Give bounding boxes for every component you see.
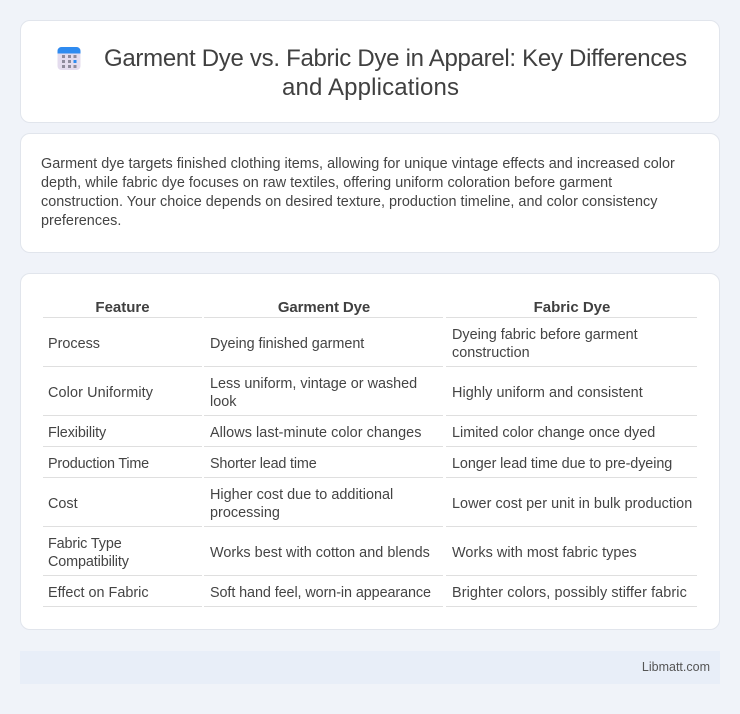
row: Process: Process <box>48 336 100 352</box>
row: Fabric Type Compatibility <box>48 536 637 570</box>
footer bar <box>20 651 720 684</box>
row: Production Time: Longer lead time due to pre-dyeing <box>452 456 672 472</box>
row: Effect on Fabric: Soft hand feel, worn-in appearance <box>210 585 431 601</box>
row: Color Uniformity: look <box>210 394 236 410</box>
row: Production Time <box>48 456 672 472</box>
row: Production Time: Production Time <box>48 456 149 472</box>
row: Effect on Fabric <box>48 585 687 601</box>
row: Color Uniformity: Less uniform, vintage or washed <box>210 376 417 392</box>
row: Process: Dyeing finished garment <box>210 336 364 352</box>
table header: Fabric Dye <box>534 299 610 316</box>
row: Color Uniformity <box>48 376 643 410</box>
row: Color Uniformity: Highly uniform and consistent <box>452 385 643 401</box>
row: Cost: Higher cost due to additional <box>210 487 393 503</box>
row: Cost: Lower cost per unit in bulk production <box>452 496 692 512</box>
title: and Applications <box>282 74 459 101</box>
row: Flexibility: Flexibility <box>48 425 106 441</box>
row: Flexibility: Limited color change once dyed <box>452 425 655 441</box>
intro paragraph: depth, while fabric dye focuses on raw textiles, offering uniform coloration before garment <box>41 175 612 191</box>
intro paragraph: preferences. <box>41 213 121 229</box>
row: Color Uniformity: Color Uniformity <box>48 385 153 401</box>
row: Cost: Cost <box>48 496 78 512</box>
row: Fabric Type Compatibility: Fabric Type <box>48 536 122 552</box>
title: Garment Dye vs. Fabric Dye in Apparel: Key Differences <box>104 45 687 72</box>
row: Process <box>48 327 638 361</box>
row: Effect on Fabric: Effect on Fabric <box>48 585 149 601</box>
intro paragraph: Garment dye targets finished clothing items, allowing for unique vintage effects and increased color <box>41 156 675 172</box>
table header: Garment Dye <box>278 299 370 316</box>
row: Effect on Fabric: Brighter colors, possibly stiffer fabric <box>452 585 687 601</box>
row: Production Time: Shorter lead time <box>210 456 317 472</box>
panel: comparison table card <box>20 273 720 630</box>
panel: intro text card <box>20 133 720 253</box>
row: Fabric Type Compatibility: Works best with cotton and blends <box>210 545 430 561</box>
table header <box>95 299 610 316</box>
title <box>104 45 687 101</box>
panel: title card <box>20 20 720 123</box>
row: Flexibility: Allows last-minute color changes <box>210 425 421 441</box>
row: Cost: processing <box>210 505 280 521</box>
row: Process: construction <box>452 345 530 361</box>
icon: calendar <box>58 47 80 70</box>
intro paragraph: construction. Your choice depends on desired texture, production timeline, and color consistency <box>41 194 657 210</box>
table header: Feature <box>95 299 150 316</box>
row: Flexibility <box>48 425 655 441</box>
row: Fabric Type Compatibility: Works with most fabric types <box>452 545 637 561</box>
row: Process: Dyeing fabric before garment <box>452 327 638 343</box>
footer credit: Libmatt.com <box>642 660 710 674</box>
row: Fabric Type Compatibility: Compatibility <box>48 554 129 570</box>
intro paragraph <box>41 156 675 229</box>
row: Cost <box>48 487 692 521</box>
